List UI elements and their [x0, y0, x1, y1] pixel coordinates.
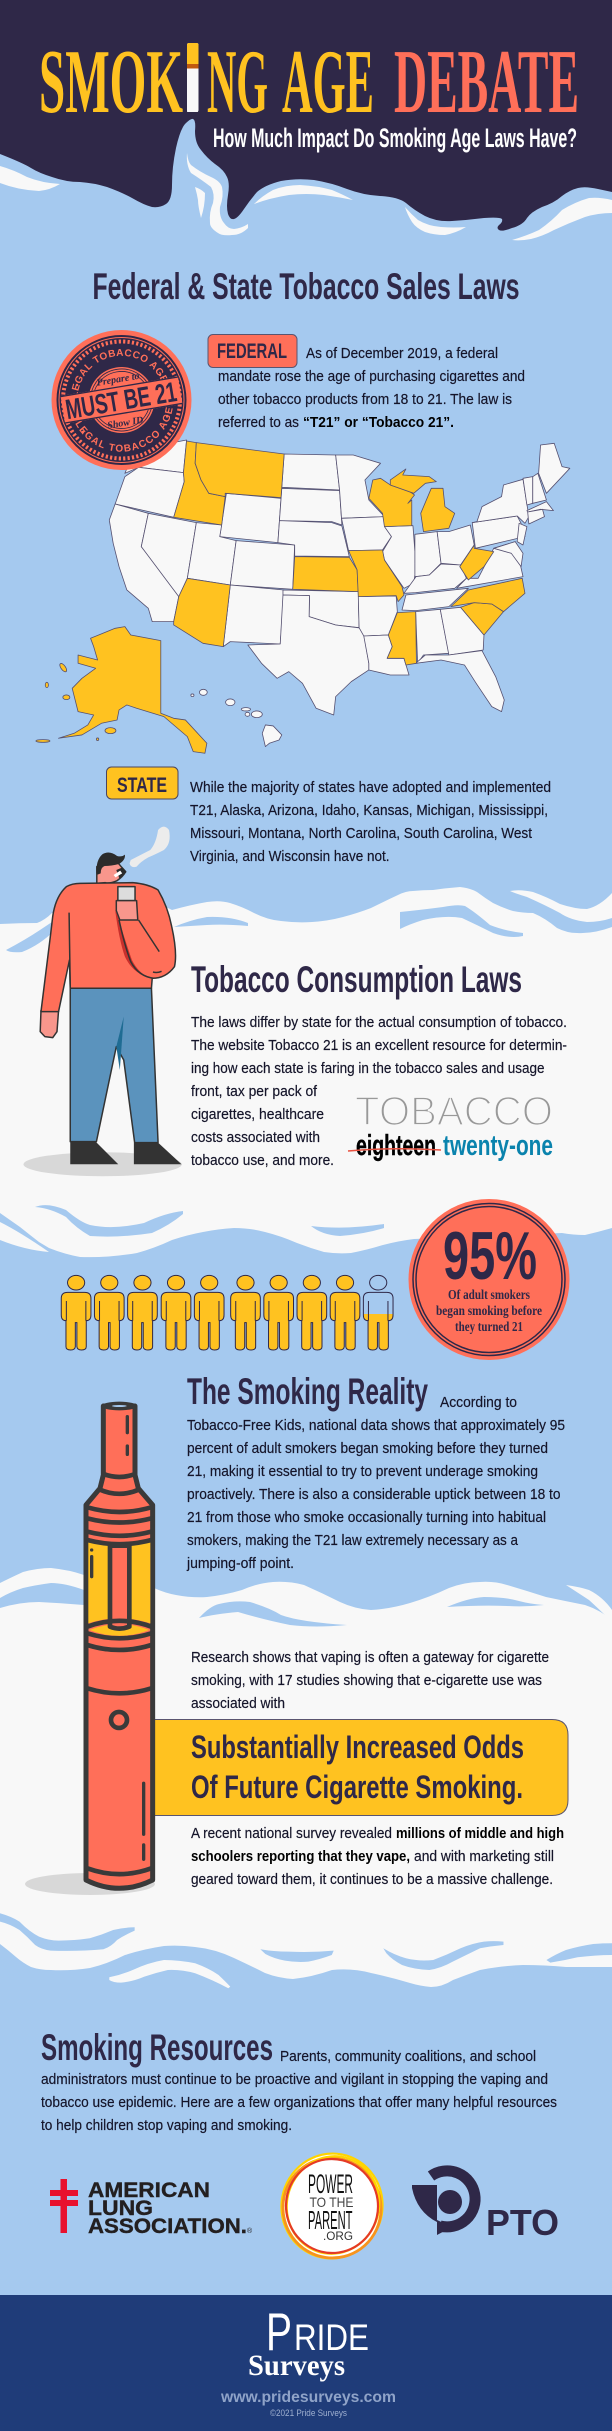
stamp: must be 21: LEGAL TOBACCO AGE [75, 407, 173, 452]
title: I [186, 31, 199, 132]
logo: tobacco eighteen twenty-one: eighteen [356, 1130, 436, 1162]
logo: pride surveys: P [266, 2303, 292, 2362]
logo: american lung association: AMERICAN [88, 2179, 210, 2202]
text: the smoking reality: Tobacco-Free Kids, national data shows that approximately 95 [187, 1418, 565, 1434]
circle: 95 percent: began smoking before [436, 1304, 542, 1319]
circle: 95 percent: 95% [443, 1218, 537, 1294]
logo: american lung association [50, 2179, 253, 2238]
text: federal law: mandate rose the age of purchasing cigarettes and [218, 369, 525, 385]
hand [40, 1011, 59, 1038]
logo: power to the parent: .ORG [323, 2229, 353, 2243]
wave accents at top of white section [6, 890, 612, 952]
text: the smoking reality: proactively. There is also a considerable uptick between 18 to [187, 1487, 560, 1503]
white section: tobacco consumption [0, 887, 612, 1257]
badge: federal: FEDERAL [217, 340, 287, 363]
smoke [130, 827, 170, 867]
text: smoking resources: Parents, community coalitions, and school [280, 2049, 536, 2065]
logo: pride surveys [248, 2303, 369, 2382]
text: the smoking reality: jumping-off point. [186, 1556, 294, 1572]
icon: vape pen [86, 1402, 153, 1888]
circle: 95 percent [408, 1199, 570, 1360]
text: state law: Missouri, Montana, North Carolina, South Carolina, West [190, 826, 532, 842]
icon: cigarette as letter I [187, 43, 198, 112]
Alaska [36, 627, 207, 753]
text: the smoking reality: 21 from those who smoke occasionally turning into habitual [187, 1510, 546, 1526]
contiguous states, non-adopting states in yellow [109, 440, 570, 715]
logo: tobacco eighteen twenty-one: TOBACCO [355, 1088, 553, 1134]
circle: 95 percent: they turned 21 [455, 1320, 523, 1335]
text: federal law: referred to as [218, 415, 299, 431]
logo: PTO: PTO [486, 2202, 559, 2243]
text: state law [190, 780, 551, 865]
text: vaping gateway [191, 1650, 549, 1712]
title: AGE [282, 31, 374, 132]
logo: power to the parent: POWER [308, 2169, 353, 2199]
text: smoking resources [41, 2049, 557, 2134]
logo: american lung association: LUNG [88, 2197, 153, 2220]
text: consumption laws: tobacco use, and more. [191, 1153, 334, 1169]
badge: federal [208, 334, 297, 368]
text: vaping gateway: associated with [191, 1696, 285, 1712]
text: consumption laws: costs associated with [191, 1130, 320, 1146]
stamp: must be 21: Show ID [107, 415, 144, 432]
text: national survey: geared toward them, it continues to be a massive challenge. [191, 1872, 553, 1888]
logo: pride surveys: Surveys [248, 2349, 345, 2382]
logo: PTO [412, 2171, 559, 2243]
text: the smoking reality: 21, making it essential to try to prevent underage smoking [187, 1464, 538, 1480]
text: consumption laws: cigarettes, healthcare [191, 1107, 324, 1123]
text: state law: Virginia, and Wisconsin have not. [190, 849, 390, 865]
yellow states [174, 441, 525, 665]
tank [88, 1542, 150, 1636]
logo: american lung association: ® [247, 2227, 253, 2235]
text: national survey: A recent national survey revealed [191, 1826, 392, 1842]
text: consumption laws: front, tax per pack of [191, 1084, 318, 1100]
logo: american lung association: ASSOCIATION. [88, 2215, 247, 2238]
text: federal law: other tobacco products from 18 to 21. The law is [218, 392, 512, 408]
text: the smoking reality [186, 1395, 565, 1572]
title: NG [207, 31, 268, 132]
Hawaii [191, 689, 282, 747]
title [39, 31, 579, 132]
logo: tobacco eighteen twenty-one [348, 1088, 553, 1162]
website address: www.pridesurveys.com [220, 2389, 396, 2406]
text: consumption laws: ing how each state is faring in the tobacco sales and usage [191, 1061, 544, 1077]
text: vaping gateway: smoking, with 17 studies showing that e-cigarette use was [191, 1673, 542, 1689]
stamp: must be 21: Prepare to [96, 371, 140, 389]
ground shadow [23, 1152, 182, 1176]
text: the smoking reality: percent of adult smokers began smoking before they turned [187, 1441, 548, 1457]
text: federal law: As of December 2019, a federal [306, 346, 498, 362]
phone-shaped vape and hand [116, 887, 138, 920]
wave accents at top of vaping section [0, 1568, 612, 1626]
callout: increased odds [150, 1720, 568, 1816]
shoes [70, 1142, 181, 1164]
logo: power to the parent [272, 2144, 392, 2268]
title: SMOK [39, 31, 183, 132]
pictogram: ten people, nine and a half filled [61, 1275, 393, 1350]
text: consumption laws: The website Tobacco 21 is an excellent resource for determin- [191, 1038, 567, 1054]
text: smoking resources: tobacco use epidemic. Here are a few organizations that offer many helpful resources [41, 2095, 557, 2111]
person vaping [23, 827, 182, 1176]
circle: 95 percent: Of adult smokers [448, 1288, 530, 1303]
trousers [70, 988, 158, 1143]
stamp: must be 21: LEGAL TOBACCO AGE [72, 349, 168, 394]
text: national survey: schoolers reporting that they vape, [191, 1849, 410, 1865]
text: vaping gateway: Research shows that vaping is often a gateway for cigarette [191, 1650, 549, 1666]
logo: pride surveys: RIDE [294, 2317, 369, 2358]
footer band [0, 2295, 612, 2431]
stamp: must be 21 [52, 330, 192, 470]
text: smoking resources: to help children stop vaping and smoking. [41, 2118, 292, 2134]
wave accents at bottom of vaping section [0, 1913, 612, 1988]
logo: power to the parent: TO THE [310, 2194, 354, 2210]
logo: power to the parent: PARENT [308, 2205, 353, 2235]
text: national survey [191, 1826, 564, 1888]
text: consumption laws: The laws differ by state for the actual consumption of tobacco. [191, 1015, 567, 1031]
header background [0, 0, 612, 240]
text: state law: T21, Alaska, Arizona, Idaho, Kansas, Michigan, Mississippi, [190, 803, 548, 819]
text: federal law: “T21” or “Tobacco 21”. [303, 415, 454, 431]
text: consumption laws [191, 1015, 567, 1169]
text: federal law [218, 346, 525, 431]
text: national survey: millions of middle and high [396, 1826, 564, 1842]
heading: smoking resources: Smoking Resources [41, 2027, 273, 2068]
copyright: ©2021 Pride Surveys [270, 2408, 347, 2418]
white section: vaping [0, 1582, 612, 1987]
badge: state [106, 767, 178, 799]
wave accents below white section [0, 1205, 384, 1252]
head [96, 853, 126, 883]
stamp: must be 21: MUST BE 21 [63, 376, 179, 425]
logo: tobacco eighteen twenty-one: twenty-one [443, 1130, 553, 1162]
sweater [41, 883, 176, 1012]
map of the United States [36, 440, 570, 753]
text: national survey: and with marketing still [414, 1849, 554, 1865]
vape shadow [25, 1873, 155, 1895]
text: the smoking reality: smokers, making the T21 law extremely necessary as a [187, 1533, 518, 1549]
badge: state: STATE [117, 774, 167, 797]
heading: the smoking reality: The Smoking Reality [187, 1371, 428, 1412]
text: state law: While the majority of states have adopted and implemented [190, 780, 551, 796]
text: smoking resources: administrators must continue to be proactive and vigilant in stopping the vaping and [41, 2072, 548, 2088]
text: the smoking reality: According to [440, 1395, 517, 1411]
